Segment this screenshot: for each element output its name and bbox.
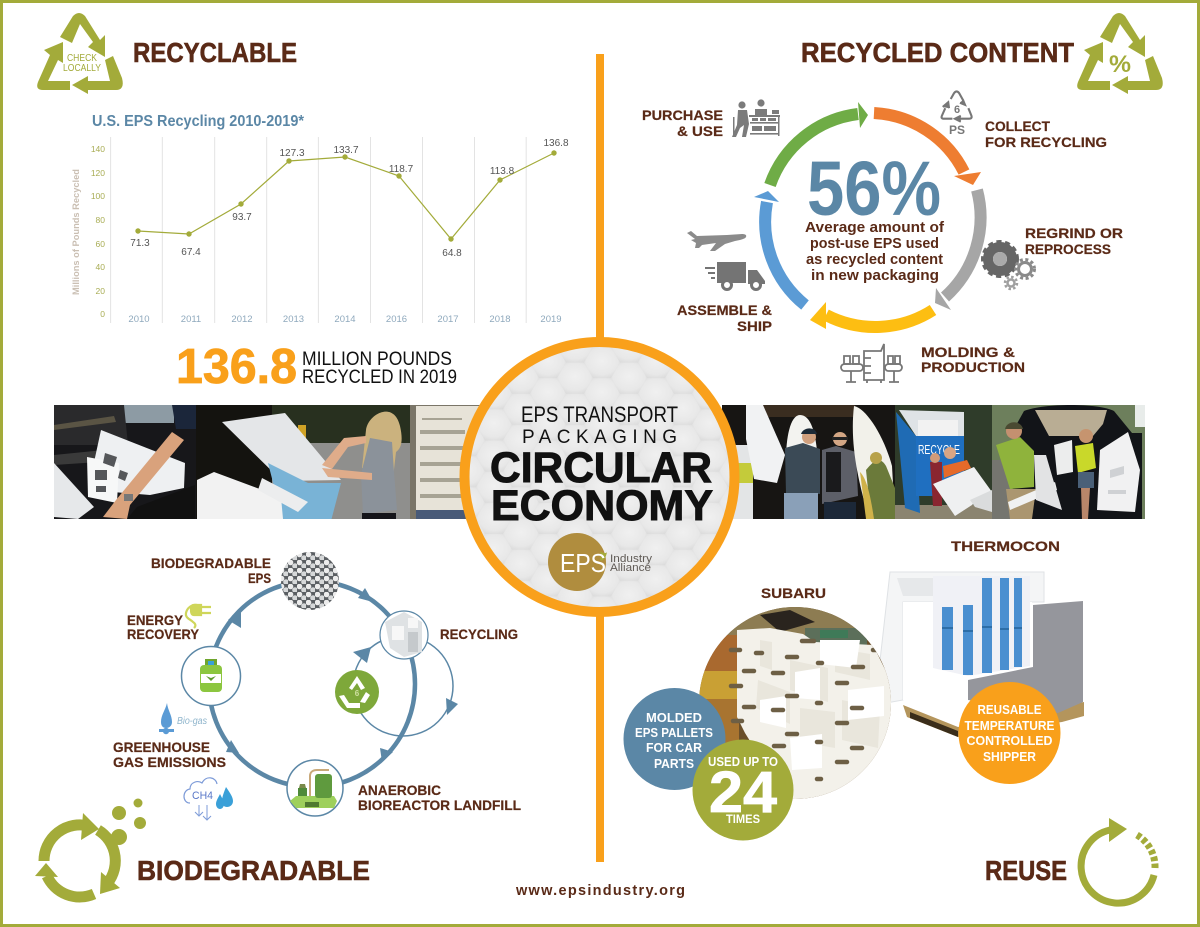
- icon: shopping: [732, 99, 780, 137]
- x axis years: 2010: [128, 314, 150, 325]
- label: molding and production: PRODUCTION: [921, 359, 1025, 375]
- data values: [130, 138, 569, 259]
- data values: 127.3: [279, 148, 305, 159]
- icon: CH4 cloud: [184, 778, 233, 820]
- arrow: grey: [935, 190, 981, 310]
- logo: EPS Industry Alliance: Alliance: [610, 562, 651, 574]
- callout: molded EPS pallets: FOR CAR: [646, 740, 703, 755]
- label: recycling: RECYCLING: [440, 626, 518, 642]
- callout: molded EPS pallets: EPS PALLETS: [635, 725, 713, 740]
- logo: EPS Industry Alliance: [548, 533, 653, 591]
- title text: PACKAGING: [522, 427, 677, 448]
- label: greenhouse gas emissions: [113, 739, 226, 770]
- label: thermocon: THERMOCON: [951, 538, 1060, 554]
- chart title: U.S. EPS Recycling 2010-2019*: [92, 113, 305, 130]
- logo: EPS Industry Alliance: EPS: [560, 548, 606, 578]
- label: energy recovery: RECOVERY: [127, 626, 200, 642]
- callout: 136.8 million pounds: 136.8: [176, 340, 297, 394]
- photo: stacked foam pallet: [410, 405, 480, 519]
- label: purchase and use: & USE: [677, 123, 723, 139]
- label: collect for recycling: FOR RECYCLING: [985, 134, 1107, 150]
- main cycle ring: [209, 581, 415, 787]
- y axis ticks: 20: [96, 286, 105, 296]
- callout: used up to 24 times: 24: [709, 760, 777, 825]
- icon: resin code 6 PS: PS: [949, 123, 965, 137]
- x axis years: 2014: [334, 314, 356, 325]
- stat description: as recycled content: [806, 252, 943, 268]
- title text: EPS TRANSPORT: [521, 402, 678, 427]
- arrow: orange: [874, 113, 981, 185]
- data values: 118.7: [389, 164, 414, 175]
- icon: plug: [186, 605, 211, 628]
- callout: reusable shipper: SHIPPER: [983, 749, 1037, 764]
- recycled content cycle: [642, 91, 1123, 383]
- stat description: post-use EPS used: [810, 236, 939, 252]
- website url: www.epsindustry.org: [515, 883, 685, 899]
- cycle arrowheads: [226, 588, 458, 762]
- badge: recycling code 6: 6: [355, 689, 360, 698]
- x axis years: [128, 314, 562, 325]
- data values: 71.3: [130, 238, 150, 249]
- icon: recycle check locally: CHECK: [67, 53, 97, 64]
- photo: thermocon shipper: [875, 572, 1084, 737]
- callout: reusable shipper: TEMPERATURE: [964, 718, 1055, 733]
- label: anaerobic bioreactor landfill: ANAEROBIC: [358, 782, 441, 798]
- data values: 113.8: [490, 166, 515, 177]
- data values: 136.8: [543, 138, 569, 149]
- label: regrind or reprocess: [1025, 225, 1123, 257]
- label: assemble and ship: [677, 302, 772, 334]
- x axis years: 2013: [283, 314, 304, 325]
- label: greenhouse gas emissions: GAS EMISSIONS: [113, 754, 226, 770]
- data values: 93.7: [232, 212, 252, 223]
- label: purchase and use: [642, 107, 723, 139]
- arrow: yellow: [810, 302, 933, 329]
- stat: 56%: 56%: [807, 146, 941, 232]
- icon: recycle percent: [1077, 13, 1163, 94]
- icon: recycle check locally: LOCALLY: [63, 63, 101, 74]
- callout: used up to 24 times: [692, 740, 794, 840]
- photo: woman with foam board: [196, 405, 410, 521]
- photo: subaru pallets: [699, 607, 900, 810]
- data values: 133.7: [333, 145, 359, 156]
- icon: plane: [687, 231, 746, 251]
- label: assemble and ship: SHIP: [737, 318, 772, 334]
- title roundel: [464, 342, 734, 612]
- data values: 64.8: [442, 248, 462, 259]
- icon: biodegradable arrows and dots: [35, 798, 146, 897]
- orange vertical divider: [596, 54, 604, 862]
- photo: surfboards: [722, 405, 895, 519]
- y axis ticks: [91, 144, 105, 319]
- icon: bio-gas flame: [159, 703, 207, 734]
- label: biodegradable EPS: BIODEGRADABLE: [151, 555, 271, 571]
- heading: recyclable: RECYCLABLE: [133, 37, 297, 68]
- title text: ECONOMY: [491, 482, 713, 530]
- x axis years: 2016: [386, 314, 407, 325]
- icon: recycle check locally: [37, 13, 123, 94]
- recycle bin sign: RECYCLE: [918, 442, 960, 457]
- y axis ticks: 120: [91, 168, 105, 178]
- y axis ticks: 0: [100, 309, 105, 319]
- callout: reusable shipper: CONTROLLED: [966, 733, 1052, 748]
- photo: foam in car trunk: [54, 405, 196, 519]
- label: biodegradable EPS: [151, 555, 271, 586]
- node: biogas tank: [182, 646, 240, 706]
- badge: recycling code 6: [335, 670, 379, 714]
- icon: recycle percent: %: [1109, 51, 1131, 78]
- label: biodegradable EPS: EPS: [248, 570, 271, 586]
- callout: used up to 24 times: TIMES: [726, 812, 760, 826]
- callout: molded EPS pallets: [624, 688, 726, 790]
- node: biodegradable EPS beads: [281, 552, 339, 610]
- callout: molded EPS pallets: MOLDED: [646, 710, 702, 725]
- label: anaerobic bioreactor landfill: [358, 782, 521, 813]
- title text: [490, 402, 713, 530]
- biodegradable cycle diagram: [113, 552, 521, 820]
- callout: used up to 24 times: USED UP TO: [708, 754, 778, 769]
- callout: reusable shipper: REUSABLE: [978, 702, 1042, 717]
- x axis years: 2017: [437, 314, 459, 325]
- label: regrind or reprocess: REGRIND OR: [1025, 225, 1123, 241]
- node: anaerobic landfill: [287, 760, 343, 816]
- label: subaru: SUBARU: [761, 585, 826, 601]
- label: greenhouse gas emissions: GREENHOUSE: [113, 739, 210, 755]
- label: anaerobic bioreactor landfill: BIOREACTOR LANDFILL: [358, 797, 521, 813]
- callout: 136.8 million pounds: [176, 340, 457, 394]
- icon: resin code 6 PS: [942, 91, 972, 137]
- callout: 136.8 million pounds: MILLION POUNDS: [302, 349, 452, 370]
- stat description: in new packaging: [811, 268, 939, 284]
- logo: EPS Industry Alliance: Industry: [610, 553, 653, 565]
- stat description: Average amount of: [805, 220, 944, 236]
- data values: 67.4: [181, 247, 201, 258]
- label: assemble and ship: ASSEMBLE &: [677, 302, 772, 318]
- label: collect for recycling: [985, 118, 1107, 150]
- title text: CIRCULAR: [490, 444, 712, 492]
- icon: resin code 6 PS: 6: [954, 104, 960, 116]
- label: collect for recycling: COLLECT: [985, 118, 1050, 134]
- heading: reuse: REUSE: [985, 855, 1067, 886]
- arrow: blue: [754, 191, 805, 305]
- y axis ticks: 140: [91, 144, 105, 154]
- label: molding and production: MOLDING &: [921, 344, 1015, 360]
- icon: gears: [983, 242, 1034, 289]
- photo strip: [54, 405, 1145, 521]
- icon: reuse arrow: [1081, 818, 1155, 903]
- recycling loop: [353, 636, 453, 736]
- y axis ticks: 40: [96, 262, 105, 272]
- y axis ticks: 100: [91, 191, 105, 201]
- callout: reusable shipper: [958, 682, 1060, 784]
- icon: truck: [705, 262, 765, 290]
- stat description: [805, 220, 944, 284]
- heading: biodegradable: BIODEGRADABLE: [137, 855, 370, 886]
- node: recycling foam: [380, 611, 428, 659]
- icon: CH4 cloud: CH4: [192, 790, 213, 802]
- heading: recycled content: RECYCLED CONTENT: [801, 37, 1074, 68]
- callout: 136.8 million pounds: RECYCLED IN 2019: [302, 367, 457, 388]
- callout: molded EPS pallets: PARTS: [654, 756, 694, 771]
- y axis ticks: 60: [96, 239, 105, 249]
- y axis ticks: 80: [96, 215, 105, 225]
- icon: bio-gas flame: Bio-gas: [177, 716, 207, 727]
- label: purchase and use: PURCHASE: [642, 107, 723, 123]
- photo: kids at recycle bin: [895, 405, 992, 519]
- data line: [138, 153, 554, 239]
- y axis label: Millions of Pounds Recycled: [71, 169, 82, 295]
- photo: volunteers at car: [992, 405, 1145, 519]
- x axis years: 2012: [231, 314, 253, 325]
- arrow: green: [770, 102, 868, 185]
- label: energy recovery: [127, 612, 200, 642]
- chart: U.S. EPS recycling line chart: [71, 113, 569, 325]
- x axis years: 2011: [181, 314, 201, 325]
- label: molding and production: [921, 344, 1025, 375]
- x axis years: 2018: [489, 314, 511, 325]
- x axis years: 2019: [540, 314, 562, 325]
- label: regrind or reprocess: REPROCESS: [1025, 241, 1111, 257]
- label: energy recovery: ENERGY: [127, 612, 184, 628]
- icon: production line: [841, 344, 902, 383]
